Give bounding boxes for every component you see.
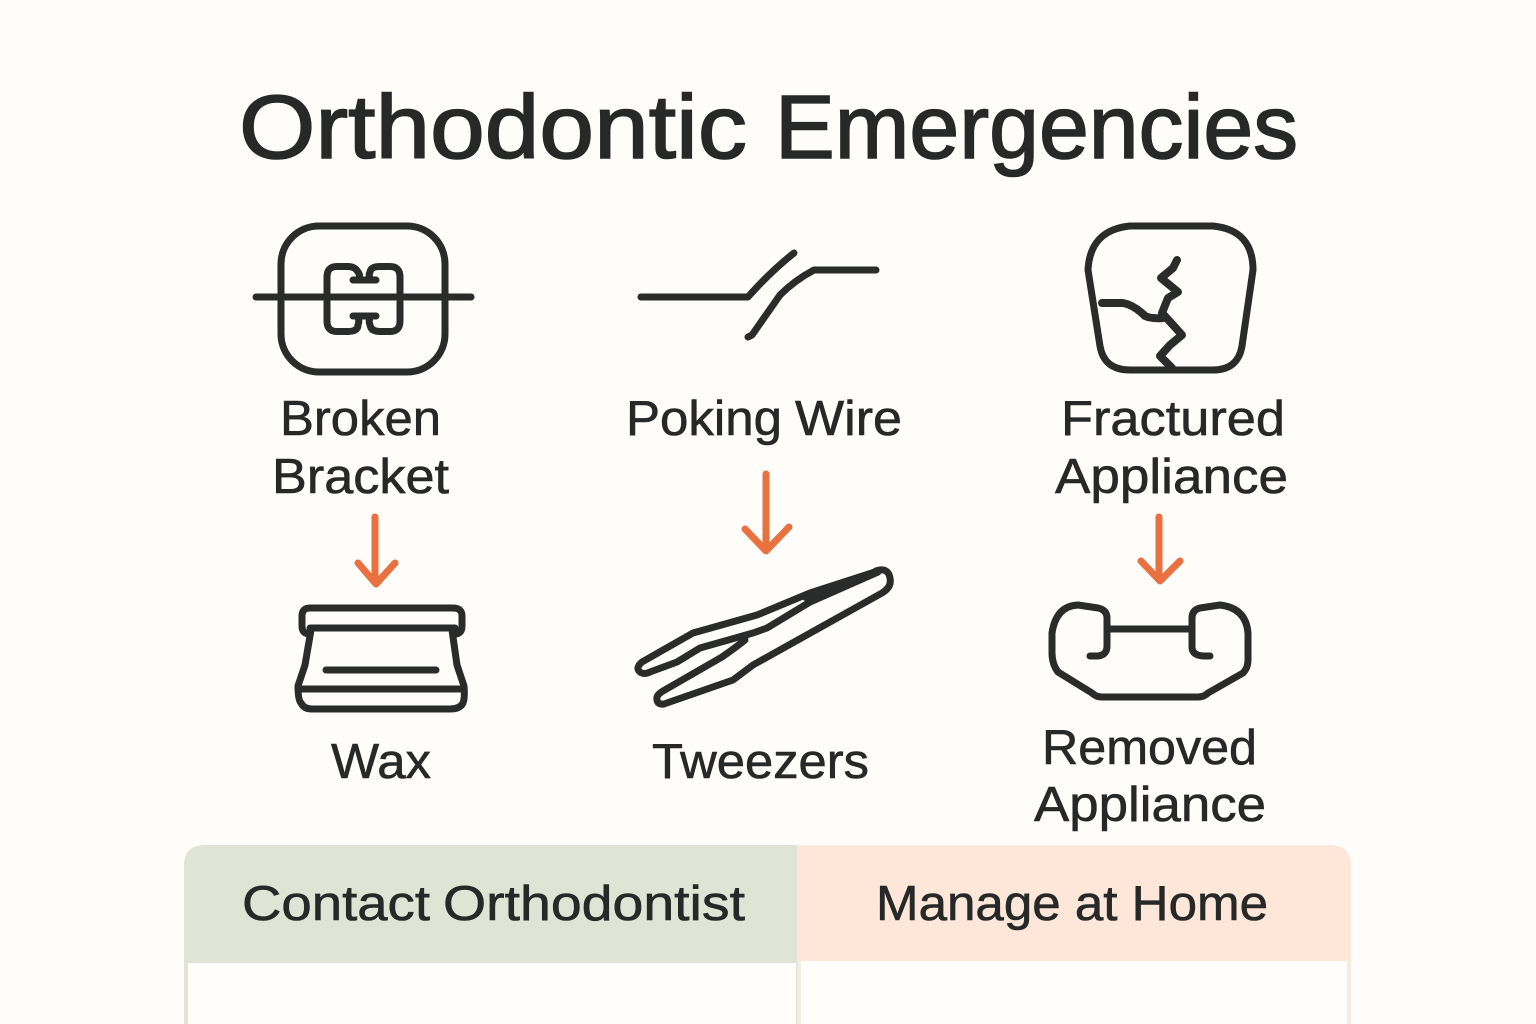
title: [239, 78, 1298, 178]
icon: fractured appliance: [1088, 226, 1253, 370]
label: broken bracket: Bracket: [272, 450, 449, 504]
label: removed appliance: Appliance: [1034, 778, 1266, 832]
panel: manage at home: [799, 846, 1351, 1024]
header: contact orthodontist: [184, 846, 799, 963]
label: removed appliance: Removed: [1042, 721, 1257, 775]
heading: contact orthodontist: [242, 877, 745, 931]
label: poking wire: [626, 392, 902, 446]
icon: wax: [298, 608, 464, 709]
label: fractured appliance: Fractured: [1061, 392, 1285, 446]
icon: removed appliance: [1052, 605, 1248, 697]
icon: broken bracket: [256, 226, 471, 372]
heading: contact orthodontist: Orthodontist: [443, 877, 745, 931]
arrow: appliance to removed appliance: [1141, 517, 1180, 581]
title: Emergencies: [775, 78, 1298, 178]
label: tweezers: Tweezers: [652, 735, 869, 789]
heading: contact orthodontist: Contact: [242, 877, 430, 931]
arrow: wire to tweezers: [745, 474, 789, 551]
label: fractured appliance: Appliance: [1055, 450, 1288, 504]
heading: manage at home: Manage at Home: [876, 877, 1268, 931]
icon: tweezers: [638, 570, 890, 704]
title: Orthodontic: [239, 78, 747, 178]
icon: poking wire: [641, 253, 876, 337]
label: removed appliance: [1034, 721, 1266, 832]
label: poking wire: Wire: [795, 392, 902, 446]
label: fractured appliance: [1055, 392, 1288, 504]
panel: contact orthodontist: [184, 846, 799, 1024]
arrow: bracket to wax: [358, 517, 395, 584]
label: broken bracket: [272, 392, 449, 504]
label: broken bracket: Broken: [280, 392, 441, 446]
label: poking wire: Poking: [626, 392, 782, 446]
header: manage at home: [799, 846, 1351, 961]
label: wax: Wax: [331, 735, 431, 789]
